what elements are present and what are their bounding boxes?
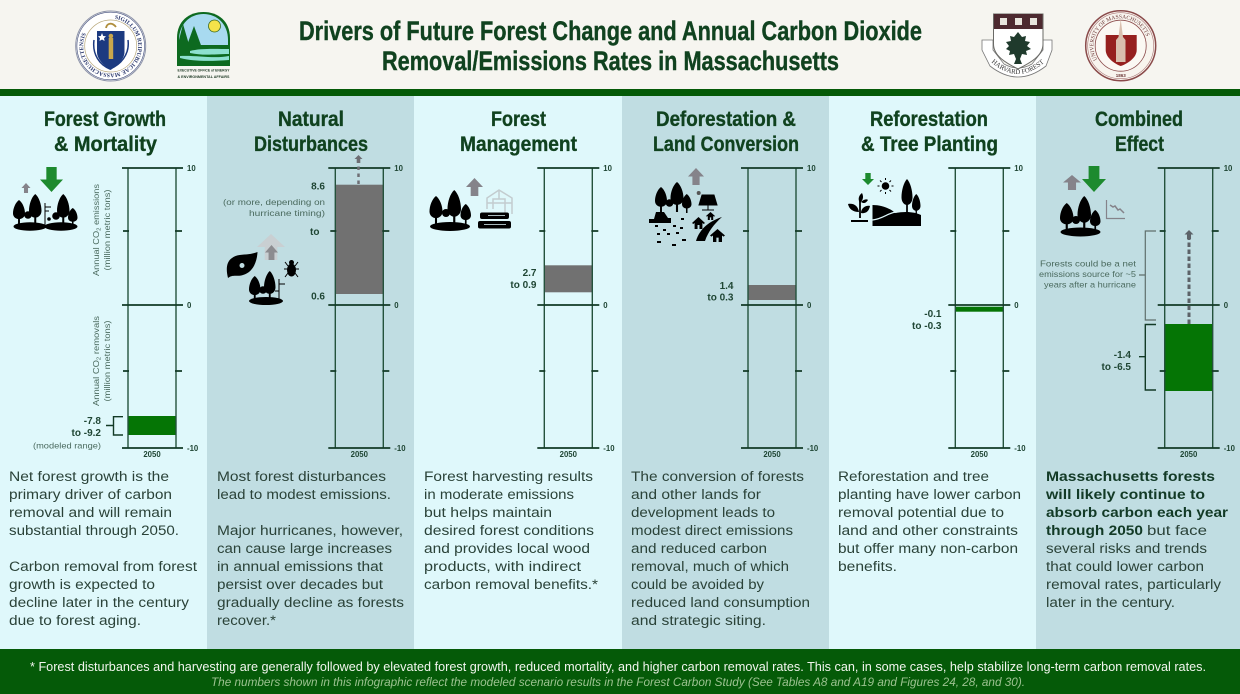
icon: hurricane, beetle and forest	[227, 234, 299, 305]
logo: University of Massachusetts seal: 1863	[1116, 73, 1126, 78]
icon: land conversion scene	[649, 168, 725, 245]
heading	[460, 108, 577, 156]
heading: Management	[460, 133, 577, 156]
bar chart: 0	[394, 301, 399, 310]
bar chart	[741, 164, 819, 459]
body text: that could lower carbon	[1046, 558, 1204, 574]
value label: 1.4	[720, 281, 734, 292]
value label	[912, 309, 942, 332]
y-axis labels: Annual CO	[91, 234, 101, 276]
body text: benefits.	[838, 558, 897, 574]
bar chart: 0	[187, 301, 192, 310]
body text: development leads to	[631, 504, 775, 520]
body text: and reduced carbon	[631, 540, 767, 556]
heading: Forest	[491, 108, 546, 131]
body text: primary driver of carbon	[9, 486, 172, 502]
body text: Major hurricanes, however,	[217, 522, 403, 538]
body text: can cause large increases	[217, 540, 392, 556]
bar chart: 10	[807, 164, 816, 173]
bar chart: 0	[807, 301, 812, 310]
body text: Massachusetts forests	[1046, 468, 1215, 484]
value label	[707, 281, 734, 304]
value label: (or more, depending on	[223, 197, 325, 207]
body text: due to forest aging.	[9, 612, 141, 628]
body text: in annual emissions that	[217, 558, 383, 574]
heading	[1095, 108, 1183, 156]
body text: Forest harvesting results	[424, 468, 593, 484]
value label: 2.7	[523, 268, 537, 279]
value label: to -6.5	[1102, 362, 1131, 373]
value label: to	[310, 227, 320, 238]
logo: Harvard Forest shield: HARVARD FOREST	[992, 58, 1044, 74]
footer band	[0, 649, 1240, 694]
y-axis labels: 2	[96, 228, 102, 231]
body text: land and other constraints	[838, 522, 1018, 538]
callout: net emissions source: emissions source for ~5	[1039, 269, 1136, 279]
icon: forest with removal arrow	[13, 167, 78, 231]
title: Removal/Emissions Rates in Massachusetts	[382, 46, 839, 76]
bar chart: -10	[187, 444, 199, 453]
panel: natural disturbances	[217, 108, 406, 628]
panel: forest growth and mortality	[9, 108, 199, 628]
body text: growth is expected to	[9, 576, 155, 592]
body text: persist over decades but	[217, 576, 383, 592]
bar chart	[1158, 164, 1236, 459]
title: Drivers of Future Forest Change and Annual Carbon Dioxide	[299, 16, 922, 46]
logo: Harvard Forest shield	[982, 14, 1052, 78]
body text: Reforestation and tree	[838, 468, 989, 484]
panel: combined effect	[1039, 108, 1236, 610]
logo: University of Massachusetts seal	[1084, 10, 1156, 82]
body text: and strategic siting.	[631, 612, 766, 628]
bar chart: 10	[603, 164, 613, 173]
body text: removal potential due to	[838, 504, 1004, 520]
bar chart: 10	[187, 164, 196, 173]
value label: -0.1	[924, 309, 942, 320]
bar chart	[948, 164, 1026, 459]
logo: Executive Office of Energy and Environmental Affairs	[177, 12, 230, 79]
arrow: post-hurricane range	[1184, 230, 1194, 324]
callout: net emissions source: years after a hurricane	[1044, 280, 1136, 290]
value label: -7.8	[84, 416, 101, 427]
body text: recover.*	[217, 612, 277, 628]
heading: & Tree Planting	[861, 133, 998, 156]
body text: and provides local wood	[424, 540, 590, 556]
logo: Executive Office of Energy and Environmental Affairs: & ENVIRONMENTAL AFFAIRS	[178, 75, 230, 79]
bar chart	[328, 164, 406, 459]
body text	[217, 468, 404, 628]
bar chart: 2050	[351, 450, 369, 459]
bar chart: 2050	[143, 450, 161, 459]
value label: (modeled range)	[33, 440, 101, 450]
bar chart: 2050	[560, 450, 578, 459]
value label: to -9.2	[72, 428, 101, 439]
bar chart	[537, 164, 615, 459]
body text: carbon removal benefits.*	[424, 576, 599, 592]
value label	[1102, 324, 1156, 390]
value label: to 0.9	[510, 280, 537, 291]
value label: to -0.3	[912, 321, 942, 332]
bar chart: -10	[1224, 444, 1236, 453]
heading: Disturbances	[254, 133, 368, 156]
bar chart: 10	[1224, 164, 1233, 173]
logo: University of Massachusetts seal: UNIVERSITY OF MASSACHUSETTS	[1090, 14, 1150, 62]
callout: net emissions source	[1039, 231, 1156, 320]
value label: -1.4	[1114, 350, 1131, 361]
body text: removal, much of which	[631, 558, 789, 574]
body text: several risks and trends	[1046, 540, 1207, 556]
body text: absorb carbon each year	[1046, 504, 1229, 520]
heading: Combined	[1095, 108, 1183, 131]
body text: but offer many non-carbon	[838, 540, 1018, 556]
bar chart: -10	[394, 444, 406, 453]
panel: reforestation and tree planting	[838, 108, 1026, 574]
heading: Land Conversion	[653, 133, 799, 156]
y-axis labels: (million metric tons)	[102, 189, 112, 270]
panel: forest management	[424, 108, 615, 592]
title	[299, 16, 922, 76]
bar chart: -10	[603, 444, 615, 453]
heading	[254, 108, 368, 156]
body text: but helps maintain	[424, 504, 552, 520]
icon: sprout, sun and landscape	[848, 173, 921, 226]
logo: Executive Office of Energy and Environmental Affairs: EXECUTIVE OFFICE of ENERGY	[178, 68, 230, 72]
body text	[424, 468, 599, 592]
y-axis labels: (million metric tons)	[102, 320, 112, 402]
heading: Forest Growth	[44, 108, 166, 131]
body text	[838, 468, 1021, 574]
heading	[653, 108, 799, 156]
body text	[1045, 468, 1229, 610]
icon: forest, building and logs	[430, 178, 512, 231]
value label	[510, 268, 537, 291]
heading: Reforestation	[870, 108, 988, 131]
body text: substantial through 2050.	[9, 522, 179, 538]
heading: Effect	[1115, 133, 1164, 156]
body text: modest direct emissions	[631, 522, 793, 538]
arrow: upper range	[354, 155, 362, 184]
value label: 0.6	[311, 292, 325, 302]
heading	[861, 108, 998, 156]
value label: 8.6	[311, 182, 325, 192]
y-axis labels: Annual CO	[91, 364, 101, 406]
body text: gradually decline as forests	[217, 594, 404, 610]
value label	[33, 416, 123, 450]
body text: could be avoided by	[631, 576, 765, 592]
source note: The numbers shown in this infographic reflect the modeled scenario results in the Forest Carbon Study (See Tables A8 and A19 and Figures 24, 28, and 30).	[211, 675, 1025, 689]
callout: net emissions source: Forests could be a net	[1040, 258, 1137, 268]
body text: and other lands for	[631, 486, 761, 502]
bar chart: 10	[394, 164, 404, 173]
body text: but face	[1147, 522, 1207, 538]
header rule	[0, 89, 1240, 96]
y-axis labels: removals	[91, 316, 101, 357]
heading	[44, 108, 166, 156]
body text: desired forest conditions	[424, 522, 594, 538]
y-axis labels: 2	[96, 357, 102, 360]
icon: forest with arrows and trend chart	[1060, 166, 1125, 236]
body text: products, with indirect	[424, 558, 581, 574]
logo: Massachusetts state seal: SIGILLUM REIPUBLICAE MASSACHUSETTENSIS	[79, 15, 142, 78]
bar chart: 2050	[1180, 450, 1198, 459]
body text: in moderate emissions	[424, 486, 574, 502]
heading: Natural	[278, 108, 344, 131]
value label: to 0.3	[707, 292, 734, 304]
panel backgrounds	[0, 96, 1240, 649]
bar chart	[122, 164, 199, 459]
bar chart: 0	[1224, 301, 1229, 310]
body text	[631, 468, 810, 628]
body text: through 2050	[1046, 522, 1143, 538]
body text: decline later in the century	[9, 594, 190, 610]
y-axis labels	[91, 184, 112, 406]
body text: lead to modest emissions.	[217, 486, 391, 502]
bar chart: -10	[1014, 444, 1026, 453]
panel: deforestation and land conversion	[631, 108, 819, 628]
value label	[223, 182, 325, 302]
body text: removal rates, particularly	[1046, 576, 1222, 592]
body text: planting have lower carbon	[838, 486, 1021, 502]
bar chart: 0	[603, 301, 608, 310]
footnote: * Forest disturbances and harvesting are generally followed by elevated forest growth, reduced mortality, and higher carbon removal rates. This can, in some cases, help stabilize long-term carbon removal rates.	[30, 659, 1206, 674]
bar chart: 0	[1014, 301, 1019, 310]
body text: Most forest disturbances	[217, 468, 386, 484]
heading: & Mortality	[54, 133, 157, 156]
body text: later in the century.	[1046, 594, 1175, 610]
body text: removal and will remain	[9, 504, 172, 520]
y-axis labels: emissions	[91, 184, 101, 228]
value label: hurricane timing)	[249, 208, 325, 218]
body text: will likely continue to	[1045, 486, 1205, 502]
body text	[9, 468, 197, 628]
bar chart: -10	[807, 444, 819, 453]
bar chart: 2050	[763, 450, 781, 459]
bar chart: 10	[1014, 164, 1024, 173]
bar chart: 2050	[971, 450, 989, 459]
heading: Deforestation &	[656, 108, 796, 131]
body text: Carbon removal from forest	[9, 558, 197, 574]
header band	[0, 0, 1240, 89]
body text: Net forest growth is the	[9, 468, 169, 484]
body text: reduced land consumption	[631, 594, 810, 610]
body text: The conversion of forests	[631, 468, 804, 484]
